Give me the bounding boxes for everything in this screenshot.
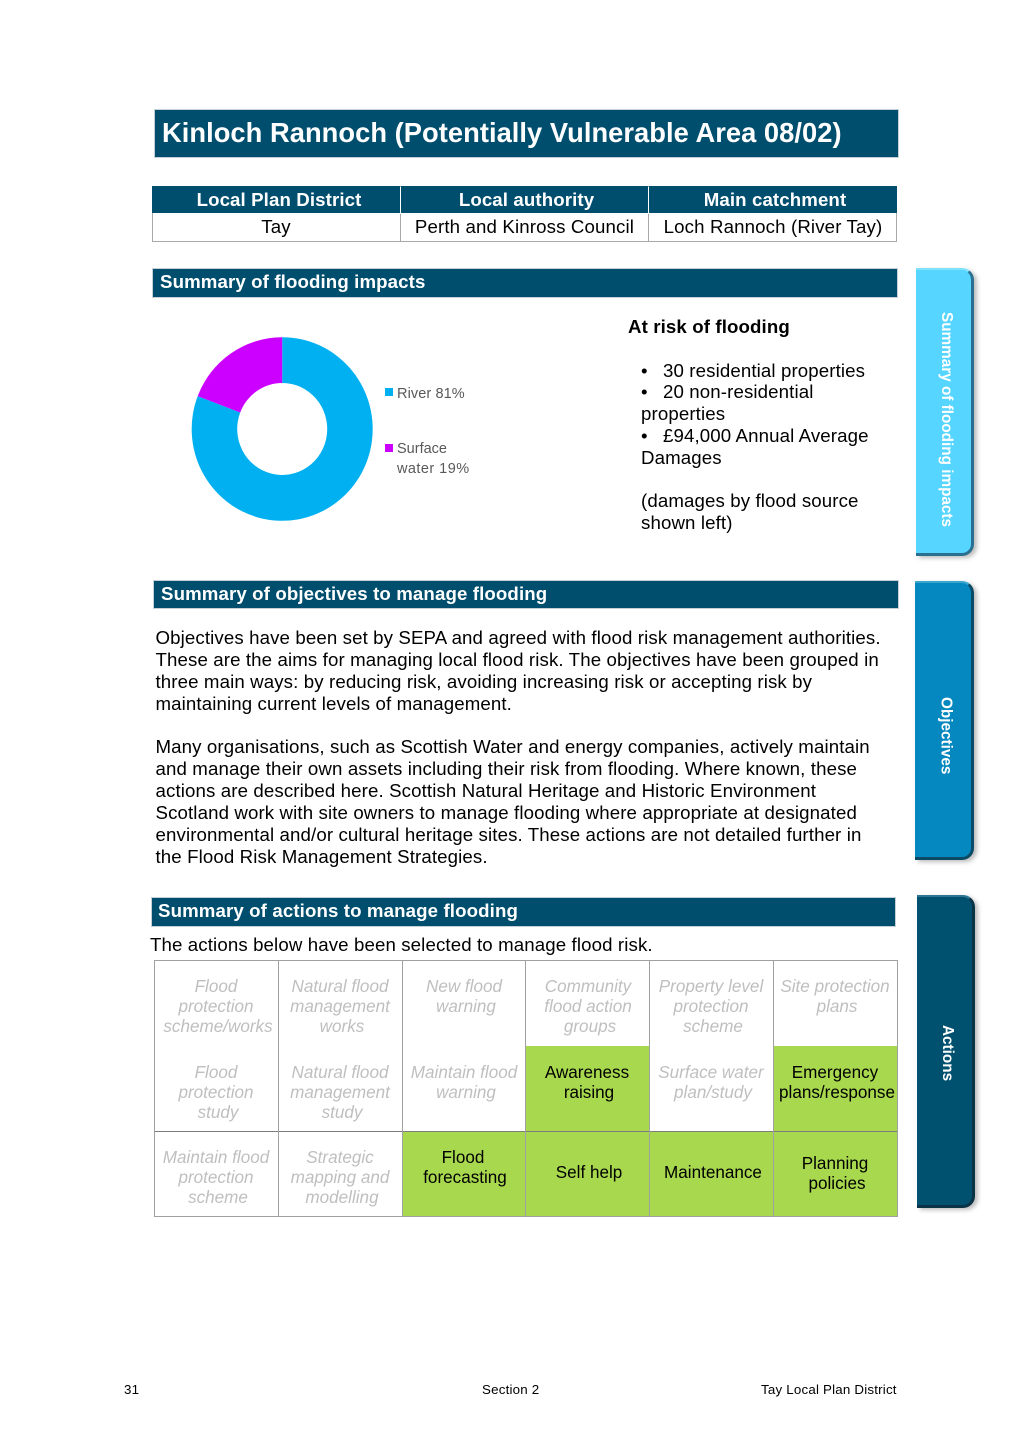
action: natural flood management works: works (320, 1016, 364, 1036)
action: property level protection scheme (659, 976, 764, 1036)
heading: summary of objectives (154, 581, 898, 608)
donut segment: river 81% (192, 337, 373, 521)
tab: objectives (915, 581, 974, 860)
at risk list: £94,000 Annual Average (663, 425, 869, 446)
tab: objectives: Objectives (938, 697, 954, 775)
objectives paragraph 2: environmental and/or cultural heritage sites. These actions are not detailed further in (156, 824, 861, 845)
heading: summary of flooding impacts (153, 269, 897, 297)
action: natural flood management works (290, 976, 390, 1036)
action: natural flood management works: Natural flood (292, 976, 388, 996)
action: flood protection scheme/works: scheme/works (163, 1016, 273, 1036)
action: flood protection study: study (198, 1102, 238, 1122)
objectives paragraph 2: actions are described here. Scottish Natural Heritage and Historic Environment (156, 780, 816, 801)
action: property level protection scheme: scheme (683, 1016, 743, 1036)
action: flood forecasting: Flood (442, 1148, 484, 1167)
title banner: Kinloch Rannoch (Potentially Vulnerable Area 08/02) (162, 117, 842, 148)
action: new flood warning: warning (436, 997, 496, 1016)
action: self help (526, 1131, 650, 1216)
action: maintain flood protection scheme (163, 1148, 270, 1206)
action: surface water plan/study: plan/study (674, 1083, 752, 1102)
action: maintain flood warning: Maintain flood (411, 1063, 517, 1082)
tab: summary of flooding impacts (916, 268, 974, 556)
objectives paragraph 1: Objectives have been set by SEPA and agreed with flood risk management authorities. (156, 627, 881, 648)
objectives paragraph 2: Many organisations, such as Scottish Water and energy companies, actively maintain (156, 736, 870, 757)
at risk list (641, 360, 869, 533)
objectives paragraph 2 (156, 736, 870, 867)
legend: surface water: water 19% (396, 461, 470, 477)
header: local authority (401, 186, 648, 213)
action: property level protection scheme: Property level (659, 976, 763, 996)
action: property level protection scheme: protection (673, 996, 749, 1016)
footer: district: Tay Local Plan District (761, 1382, 897, 1397)
action: maintain flood warning: warning (436, 1083, 496, 1102)
objectives paragraph 1: three main ways: by reducing risk, avoiding increasing risk or accepting risk by (156, 671, 812, 692)
action: emergency plans/response (773, 1046, 898, 1131)
action: surface water plan/study: Surface water (658, 1063, 764, 1082)
tab: summary of flooding impacts: Summary of flooding impacts (938, 312, 955, 528)
action: maintain flood protection scheme: scheme (188, 1188, 248, 1206)
action: planning policies (773, 1131, 898, 1216)
at risk list: properties (641, 403, 725, 424)
action: flood protection scheme/works: protection (178, 996, 254, 1016)
header: local plan district (152, 186, 400, 213)
at risk list: • (641, 360, 648, 381)
action: community flood action groups: groups (564, 1016, 616, 1036)
action: site protection plans: plans (817, 997, 857, 1016)
at risk list: shown left) (641, 512, 733, 533)
action: planning policies: policies (808, 1174, 866, 1192)
action: maintain flood protection scheme: Maintain flood (163, 1148, 269, 1166)
action: flood protection study: protection (178, 1082, 254, 1102)
action: flood protection scheme/works (163, 976, 273, 1036)
objectives paragraph 1: maintaining current levels of management. (156, 693, 512, 714)
action: strategic mapping and modelling: modelling (305, 1188, 379, 1206)
actions intro text: The actions below have been selected to manage flood risk. (150, 934, 653, 955)
header: local plan district: Local Plan District (197, 189, 361, 210)
objectives paragraph 1 (156, 627, 881, 714)
header: main catchment (649, 186, 897, 213)
action: awareness raising (526, 1046, 650, 1131)
tab: actions: Actions (939, 1025, 956, 1081)
action: flood forecasting: forecasting (423, 1168, 507, 1187)
heading: summary of actions: Summary of actions to manage flooding (158, 900, 518, 921)
legend: surface water (385, 441, 470, 477)
action: emergency plans/response: Emergency (792, 1063, 878, 1082)
action: natural flood management study: Natural flood (292, 1062, 388, 1082)
action: flood protection study: Flood (195, 1062, 237, 1082)
at risk list: (damages by flood source (641, 490, 859, 511)
action: flood protection study (178, 1062, 254, 1122)
donut chart with legend (192, 337, 470, 521)
donut segment: surface water 19% (198, 337, 282, 412)
action: strategic mapping and modelling: mapping and (291, 1168, 389, 1186)
action: natural flood management study: management (290, 1082, 390, 1102)
at risk list: 20 non-residential (663, 381, 813, 402)
action: community flood action groups: Community (545, 976, 631, 996)
at risk list: 30 residential properties (663, 360, 865, 381)
tab: actions (917, 895, 975, 1208)
action: new flood warning: New flood (426, 977, 502, 996)
action: strategic mapping and modelling (291, 1148, 390, 1206)
value: main catchment (648, 214, 897, 241)
action: natural flood management study: study (322, 1102, 362, 1122)
objectives paragraph 1: These are the aims for managing local flood risk. The objectives have been grouped in (156, 649, 879, 670)
action: surface water plan/study (658, 1063, 764, 1102)
action: maintain flood protection scheme: protection (178, 1168, 254, 1186)
legend: surface water: Surface (397, 441, 447, 457)
action: maintenance (649, 1131, 773, 1216)
at risk list: Damages (641, 447, 722, 468)
at risk list: • (641, 425, 648, 446)
at risk list: • (641, 381, 648, 402)
action: site protection plans (780, 977, 890, 1016)
action: strategic mapping and modelling: Strategic (306, 1148, 374, 1166)
action: emergency plans/response: plans/response (779, 1083, 895, 1102)
action: natural flood management study (290, 1062, 390, 1122)
value: local authority (400, 214, 648, 241)
heading: summary of actions (152, 898, 895, 926)
action: maintenance: Maintenance (664, 1163, 762, 1182)
action: self help: Self help (556, 1163, 622, 1182)
value: local authority: Perth and Kinross Council (415, 216, 634, 237)
action: community flood action groups (544, 976, 632, 1036)
value: local plan district: Tay (261, 216, 291, 237)
action: maintain flood warning (411, 1063, 518, 1102)
action: community flood action groups: flood action (544, 996, 632, 1016)
header: main catchment: Main catchment (704, 189, 846, 210)
footer: section: Section 2 (482, 1382, 539, 1397)
at risk heading: At risk of flooding (628, 316, 790, 337)
action: site protection plans: Site protection (780, 977, 890, 996)
footer: page number: 31 (124, 1382, 139, 1397)
objectives paragraph 2: Scotland work with site owners to manage flooding where appropriate at designated (156, 802, 857, 823)
header: local authority: Local authority (459, 189, 594, 210)
actions grid (154, 960, 898, 1217)
objectives paragraph 2: the Flood Risk Management Strategies. (156, 846, 488, 867)
action: awareness raising: raising (564, 1083, 614, 1102)
location table (152, 186, 897, 242)
title banner (155, 110, 898, 157)
action: flood protection scheme/works: Flood (195, 976, 237, 996)
action: natural flood management works: management (290, 996, 390, 1016)
at risk of flooding text (628, 316, 869, 533)
heading: summary of flooding impacts: Summary of flooding impacts (160, 271, 426, 292)
action: new flood warning (426, 977, 502, 1016)
action: planning policies: Planning (802, 1154, 868, 1172)
action: flood forecasting (402, 1131, 526, 1216)
value: main catchment: Loch Rannoch (River Tay) (664, 216, 882, 237)
heading: summary of objectives: Summary of objectives to manage flooding (161, 583, 547, 604)
legend: river: River 81% (397, 386, 465, 402)
action: awareness raising: Awareness (545, 1063, 629, 1082)
objectives paragraph 2: and manage their own assets including their risk from flooding. Where known, these (156, 758, 857, 779)
